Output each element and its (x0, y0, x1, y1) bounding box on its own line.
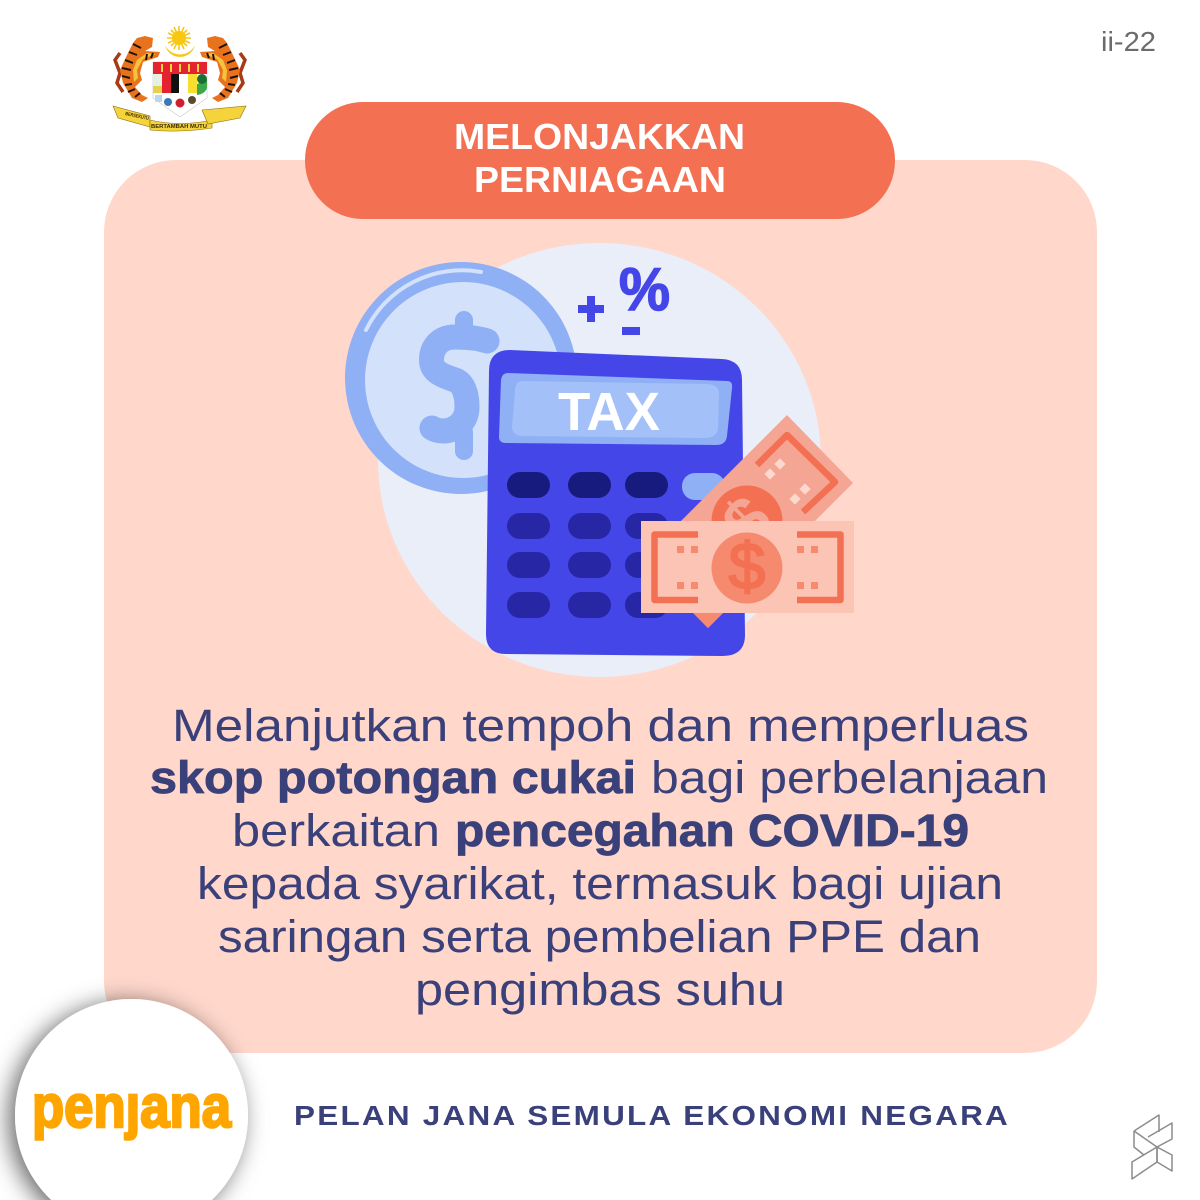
footer title: PELAN JANA SEMULA EKONOMI NEGARA (294, 1100, 1010, 1131)
label: TAX (558, 382, 660, 442)
body text: bagi perbelanjaan (651, 752, 1048, 803)
body text: skop potongan cukai (150, 752, 636, 803)
icon: front banknote (641, 521, 854, 613)
icon: publisher mark (1132, 1115, 1172, 1179)
body text: pencegahan COVID-19 (455, 805, 969, 856)
body text (150, 700, 1048, 1015)
icon: percent: % (619, 256, 670, 323)
body text: kepada syarikat, termasuk bagi ujian (197, 858, 1003, 909)
icon: front banknote: $ (729, 529, 765, 603)
icon: minus (622, 327, 640, 335)
panel: main card (104, 160, 1097, 1053)
sun star (167, 26, 191, 50)
body text: Melanjutkan tempoh dan memperluas (172, 700, 1029, 751)
calculator (486, 350, 745, 656)
ribbon with mottos: BERSEKUTU (125, 111, 150, 122)
header pill (305, 102, 895, 219)
body text: pengimbas suhu (415, 964, 785, 1015)
left tiger (115, 36, 160, 102)
icon: back banknote (681, 415, 853, 628)
screen (499, 373, 732, 445)
buttons (507, 472, 668, 498)
icon: back banknote: $ (707, 481, 785, 559)
header pill: PERNIAGAAN (474, 159, 726, 200)
icon: plus (578, 296, 604, 322)
body text: saringan serta pembelian PPE dan (218, 911, 981, 962)
heading: MELONJAKKAN (454, 116, 745, 157)
shield (153, 62, 207, 117)
right tiger (200, 36, 245, 102)
logo text: penjana (32, 1073, 232, 1140)
icon: Malaysian coat of arms (113, 26, 246, 131)
crescent (165, 45, 195, 57)
body text: berkaitan (232, 805, 440, 856)
page number: ii-22 (1101, 26, 1156, 57)
background circle (378, 243, 821, 677)
illustration: calculator, coin and money (345, 243, 854, 677)
ribbon with mottos (113, 106, 246, 131)
ribbon with mottos: BERTAMBAH MUTU (151, 124, 207, 130)
icon: coin (345, 262, 577, 494)
penjana logo badge (15, 999, 248, 1200)
